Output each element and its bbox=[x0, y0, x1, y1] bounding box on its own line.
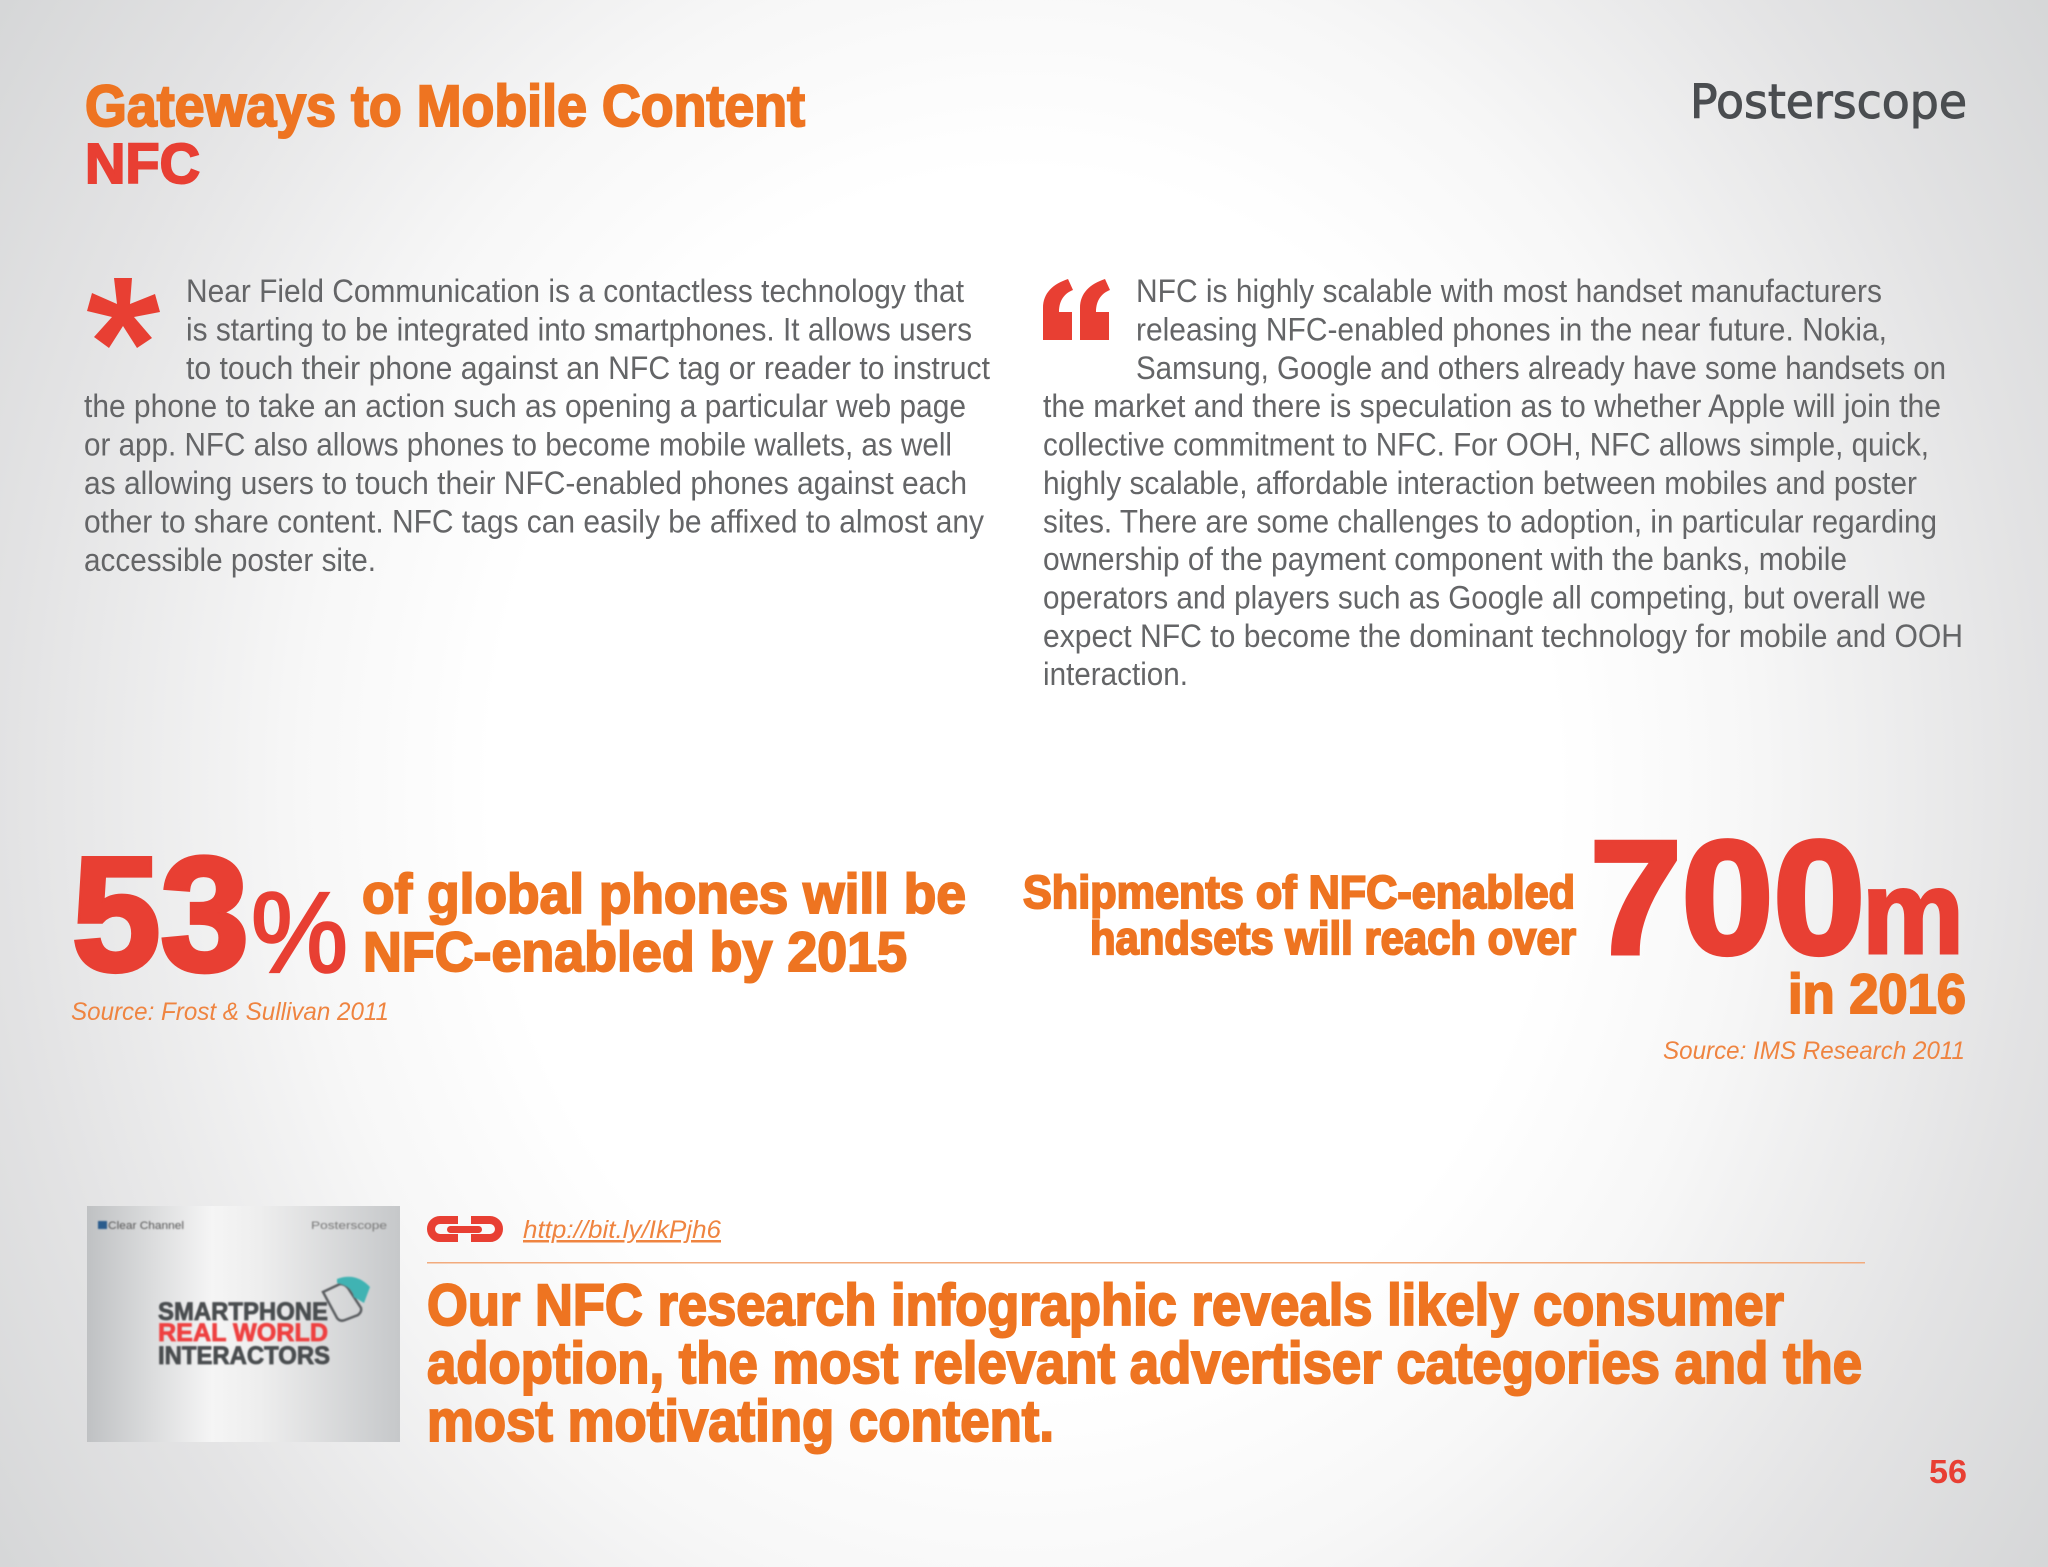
text block: NFC scalability quote: NFC is highly scalable with most handset manufacturers bbox=[1136, 273, 1882, 309]
stat: 53% of global phones bbox=[71, 824, 966, 1026]
callout: research summary: Our NFC research infographic reveals likely consumer bbox=[427, 1273, 1784, 1338]
stat description: handsets will reach over bbox=[1090, 912, 1576, 964]
stat year: in 2016 bbox=[1788, 962, 1966, 1025]
title bbox=[85, 74, 805, 196]
subtitle: NFC bbox=[85, 132, 200, 196]
callout: research summary: adoption, the most relevant advertiser categories and the bbox=[427, 1331, 1862, 1396]
text block: NFC definition: as allowing users to touch their NFC-enabled phones against each bbox=[84, 465, 967, 501]
text block: NFC definition: is starting to be integrated into smartphones. It allows users bbox=[186, 311, 972, 347]
icon: link bbox=[431, 1220, 499, 1238]
source: Frost and Sullivan: Source: Frost & Sullivan 2011 bbox=[71, 998, 389, 1026]
stat number: 53: 53 bbox=[72, 824, 249, 1005]
stat description: Shipments of NFC-enabled bbox=[1023, 866, 1575, 918]
text block: NFC scalability quote: highly scalable, affordable interaction between mobiles and poster bbox=[1043, 465, 1917, 501]
text block: NFC definition: accessible poster site. bbox=[84, 542, 376, 578]
text block: NFC scalability quote bbox=[1043, 273, 1963, 692]
text block: NFC scalability quote: sites. There are some challenges to adoption, in particular regarding bbox=[1043, 503, 1937, 539]
stat unit: m: m bbox=[1862, 847, 1964, 979]
thumbnail: infographic cover: Posterscope bbox=[311, 1220, 387, 1232]
stat unit: percent: % bbox=[251, 870, 348, 997]
thumbnail: infographic cover: SMARTPHONE bbox=[158, 1298, 328, 1326]
stat number: 700: 700 bbox=[1590, 808, 1865, 988]
text block: NFC scalability quote: interaction. bbox=[1043, 656, 1188, 692]
source: IMS Research: Source: IMS Research 2011 bbox=[1663, 1037, 1965, 1065]
text block: NFC definition bbox=[84, 273, 990, 578]
text block: NFC scalability quote: operators and players such as Google all competing, but overall we bbox=[1043, 579, 1926, 615]
thumbnail: infographic cover: Clear Channel bbox=[108, 1220, 184, 1232]
text block: NFC definition: other to share content. NFC tags can easily be affixed to almost any bbox=[84, 503, 984, 539]
callout: research summary: most motivating content. bbox=[427, 1389, 1054, 1454]
text block: NFC scalability quote: collective commitment to NFC. For OOH, NFC allows simple, quick, bbox=[1043, 427, 1929, 463]
text block: NFC scalability quote: expect NFC to become the dominant technology for mobile and OOH bbox=[1043, 618, 1963, 654]
icon: quotation mark bbox=[1043, 279, 1110, 340]
icon: asterisk bbox=[87, 278, 160, 348]
stat description bbox=[362, 862, 966, 983]
thumbnail: infographic cover bbox=[87, 1206, 400, 1442]
stat description: of global phones will be bbox=[362, 862, 966, 925]
link: bit.ly URL: http://bit.ly/IkPjh6 bbox=[523, 1216, 721, 1244]
stat description: NFC-enabled by 2015 bbox=[363, 920, 907, 983]
text block: NFC definition: or app. NFC also allows phones to become mobile wallets, as well bbox=[84, 427, 952, 463]
stat description bbox=[1023, 866, 1576, 964]
title: Gateways to Mobile Content bbox=[85, 74, 805, 139]
page number: 56 bbox=[1929, 1453, 1967, 1490]
text block: NFC definition: the phone to take an action such as opening a particular web page bbox=[84, 388, 966, 424]
text block: NFC scalability quote: releasing NFC-enabled phones in the near future. Nokia, bbox=[1136, 311, 1887, 347]
logo: Posterscope: Posterscope bbox=[1690, 75, 1967, 130]
stat: 700m shipments bbox=[1023, 808, 1966, 1065]
text block: NFC scalability quote: ownership of the payment component with the banks, mobile bbox=[1043, 541, 1847, 577]
callout: research summary bbox=[427, 1273, 1862, 1454]
text block: NFC scalability quote: Samsung, Google and others already have some handsets on bbox=[1136, 350, 1946, 386]
text block: NFC definition: to touch their phone against an NFC tag or reader to instruct bbox=[186, 350, 990, 386]
thumbnail: infographic cover: REAL WORLD bbox=[158, 1319, 328, 1347]
text block: NFC scalability quote: the market and there is speculation as to whether Apple will join the bbox=[1043, 388, 1941, 424]
text block: NFC definition: Near Field Communication is a contactless technology that bbox=[186, 273, 964, 309]
thumbnail: infographic cover: INTERACTORS bbox=[158, 1342, 330, 1370]
